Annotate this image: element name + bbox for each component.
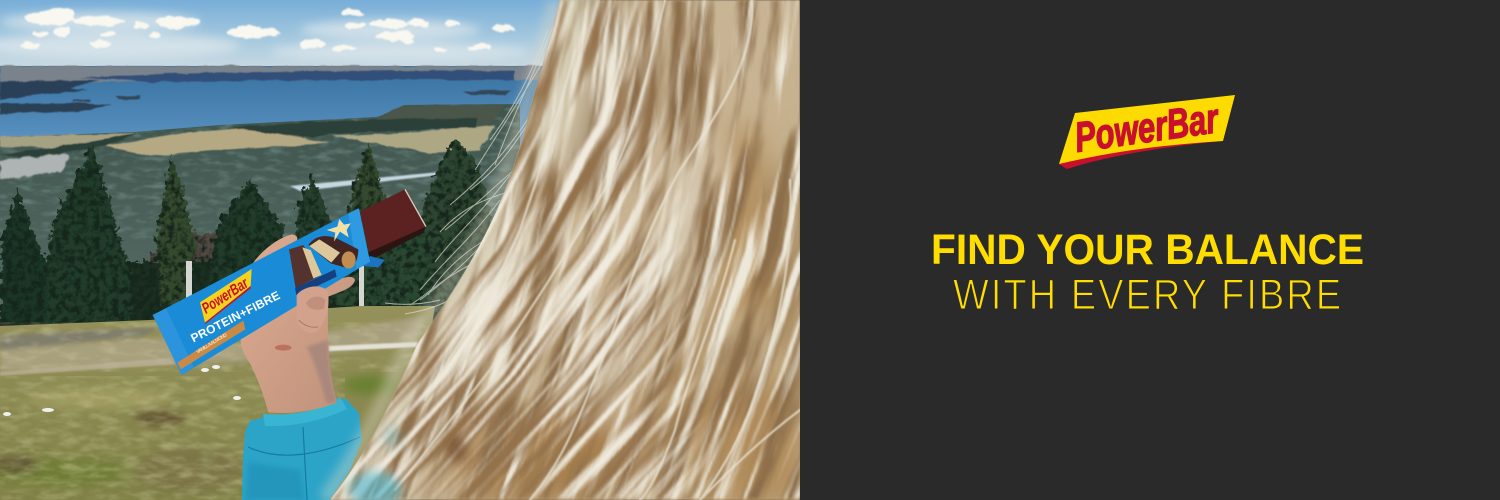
wrapper chocolate artwork bbox=[289, 219, 358, 296]
translucent wispy hair edge bbox=[325, 0, 556, 500]
chocolate protein bar bbox=[360, 189, 426, 260]
hair shading bbox=[330, 0, 800, 500]
forest tree line bbox=[0, 138, 495, 324]
PowerBar logo bbox=[1059, 94, 1235, 169]
hand behind the bar bbox=[241, 234, 355, 413]
lake and far shore bbox=[0, 64, 542, 146]
logo red underside bbox=[1059, 136, 1223, 169]
headline: FIND YOUR BALANCE bbox=[931, 226, 1364, 274]
wrapper flavour strip: VANILLA ALMOND bbox=[195, 332, 229, 355]
jacket sleeve bbox=[242, 397, 362, 500]
wrapper logo: PowerBar bbox=[199, 275, 252, 317]
logo yellow flag bbox=[1059, 95, 1235, 164]
hair texture, lower-left strands bbox=[330, 0, 716, 500]
wrapper label: PROTEIN+FIBRE bbox=[188, 288, 282, 345]
logo wordmark: PowerBar bbox=[1072, 94, 1223, 161]
wrapper logo bbox=[199, 269, 252, 324]
dark background panel bbox=[800, 0, 1500, 500]
grass hillside bbox=[0, 306, 435, 500]
photo: woman holding bar in mountain landscape bbox=[0, 0, 800, 500]
hair texture, right side strands bbox=[330, 0, 800, 500]
thumb over the wrapper bbox=[297, 286, 329, 333]
flyaway strands bbox=[385, 10, 560, 314]
subheadline: WITH EVERY FIBRE bbox=[953, 270, 1341, 319]
light hair strands bbox=[395, 0, 800, 500]
teal jacket seen through hair bbox=[349, 427, 401, 500]
bar wrapper bbox=[153, 208, 385, 375]
land and fields bbox=[0, 104, 520, 320]
blonde hair bbox=[330, 0, 800, 500]
sky with clouds bbox=[0, 0, 600, 70]
wrapper flavour strip bbox=[177, 321, 245, 369]
